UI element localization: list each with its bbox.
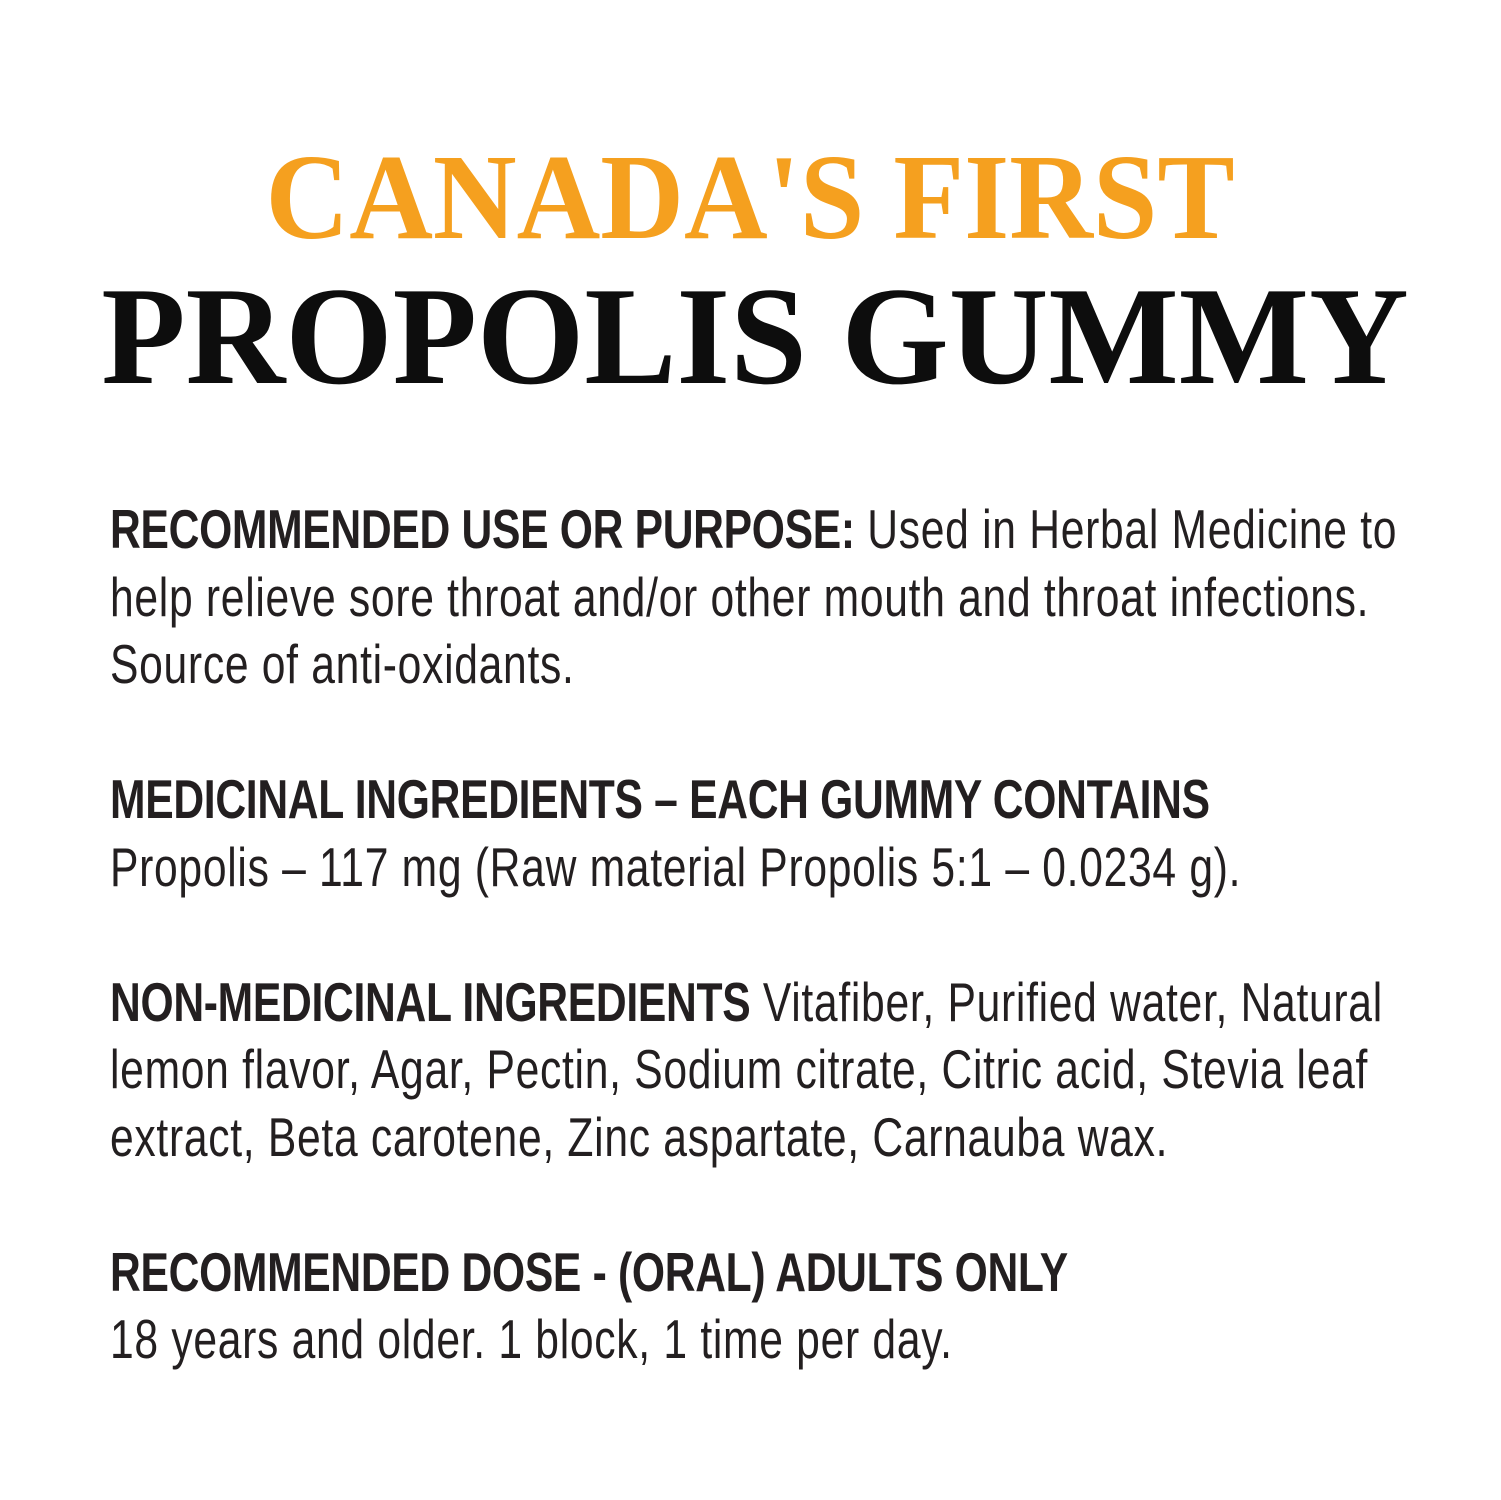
recommended use: help relieve sore throat and/or other mouth and throat infections. — [110, 566, 1369, 628]
recommended dose: RECOMMENDED DOSE - (ORAL) ADULTS ONLY — [110, 1240, 1068, 1302]
title: Propolis Gummy: PROPOLIS GUMMY — [102, 259, 1409, 414]
text block: product information — [110, 498, 1397, 1370]
non-medicinal ingredients — [110, 970, 1383, 1168]
medicinal ingredients — [110, 768, 1241, 898]
recommended dose: 18 years and older. 1 block, 1 time per day. — [110, 1308, 953, 1370]
non-medicinal ingredients: extract, Beta carotene, Zinc aspartate, Carnauba wax. — [110, 1106, 1168, 1168]
medicinal ingredients: Propolis – 117 mg (Raw material Propolis 5:1 – 0.0234 g). — [110, 836, 1241, 898]
recommended use: Source of anti-oxidants. — [110, 633, 575, 695]
title: Canada's first: CANADA'S FIRST — [266, 130, 1235, 265]
recommended use — [110, 498, 1397, 695]
medicinal ingredients: MEDICINAL INGREDIENTS – EACH GUMMY CONTAINS — [110, 768, 1210, 830]
non-medicinal ingredients: lemon flavor, Agar, Pectin, Sodium citrate, Citric acid, Stevia leaf — [110, 1038, 1368, 1100]
recommended dose — [110, 1240, 1068, 1370]
non-medicinal ingredients: NON-MEDICINAL INGREDIENTS Vitafiber, Purified water, Natural — [110, 970, 1383, 1032]
recommended use: RECOMMENDED USE OR PURPOSE: Used in Herbal Medicine to — [110, 498, 1397, 560]
